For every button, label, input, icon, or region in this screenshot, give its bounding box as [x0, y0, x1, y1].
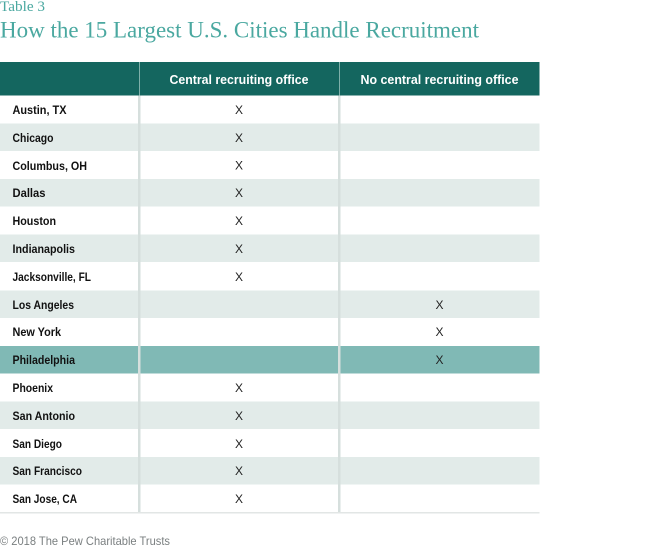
row: San Antonio: San Antonio [12, 409, 75, 423]
row shading [0, 124, 540, 484]
row: Houston: Houston [12, 214, 56, 228]
row: Columbus, OH: X [235, 158, 243, 172]
row: Austin, TX: X [235, 103, 243, 117]
row: San Diego [12, 437, 243, 451]
table [0, 62, 540, 514]
row: Los Angeles [12, 298, 444, 312]
row: Jacksonville, FL [12, 270, 243, 284]
row: San Jose, CA [12, 492, 243, 506]
row: Los Angeles: Los Angeles [12, 298, 74, 312]
row: Dallas: X [235, 186, 243, 200]
row: Phoenix: X [235, 381, 243, 395]
row: Houston: X [235, 214, 243, 228]
row: Dallas [12, 186, 243, 200]
header row: Central recruiting office [170, 72, 308, 87]
row: Columbus, OH [12, 158, 243, 173]
row: Phoenix [12, 381, 243, 395]
row: Indianapolis [12, 242, 243, 256]
header row [0, 62, 540, 96]
row: Chicago [12, 131, 243, 145]
row: New York: New York [12, 325, 61, 339]
row: Columbus, OH: Columbus, OH [12, 159, 87, 173]
header row: No central recruiting office [360, 72, 518, 87]
row: Chicago: Chicago [12, 131, 54, 145]
row: San Diego: X [235, 437, 243, 451]
row: Austin, TX: Austin, TX [12, 103, 66, 117]
row: Los Angeles: X [435, 298, 444, 312]
row: San Antonio: X [235, 409, 243, 423]
row: Philadelphia: X [435, 353, 444, 367]
row: San Francisco [12, 464, 243, 478]
row: San Francisco: San Francisco [12, 464, 82, 478]
row: San Jose, CA: X [235, 492, 243, 506]
row: Jacksonville, FL: X [235, 270, 243, 284]
row: Houston [12, 214, 243, 228]
row: San Jose, CA: San Jose, CA [12, 492, 77, 506]
row: San Diego: San Diego [12, 437, 62, 451]
title: How the 15 Largest U.S. Cities Handle Recruitment [0, 18, 480, 42]
row: New York: X [435, 325, 444, 339]
row: Philadelphia: Philadelphia [12, 353, 75, 367]
row: New York [12, 325, 444, 339]
row: Austin, TX [12, 103, 243, 117]
row: Dallas: Dallas [12, 186, 46, 200]
row: Chicago: X [235, 131, 243, 145]
row: Indianapolis: X [235, 242, 243, 256]
row: Philadelphia [12, 353, 444, 367]
copyright footer: © 2018 The Pew Charitable Trusts [0, 534, 170, 548]
row: Jacksonville, FL: Jacksonville, FL [12, 270, 91, 284]
row: Indianapolis: Indianapolis [12, 242, 75, 256]
row: Phoenix: Phoenix [12, 381, 53, 395]
row: San Antonio [12, 409, 243, 423]
row: San Francisco: X [235, 464, 243, 478]
